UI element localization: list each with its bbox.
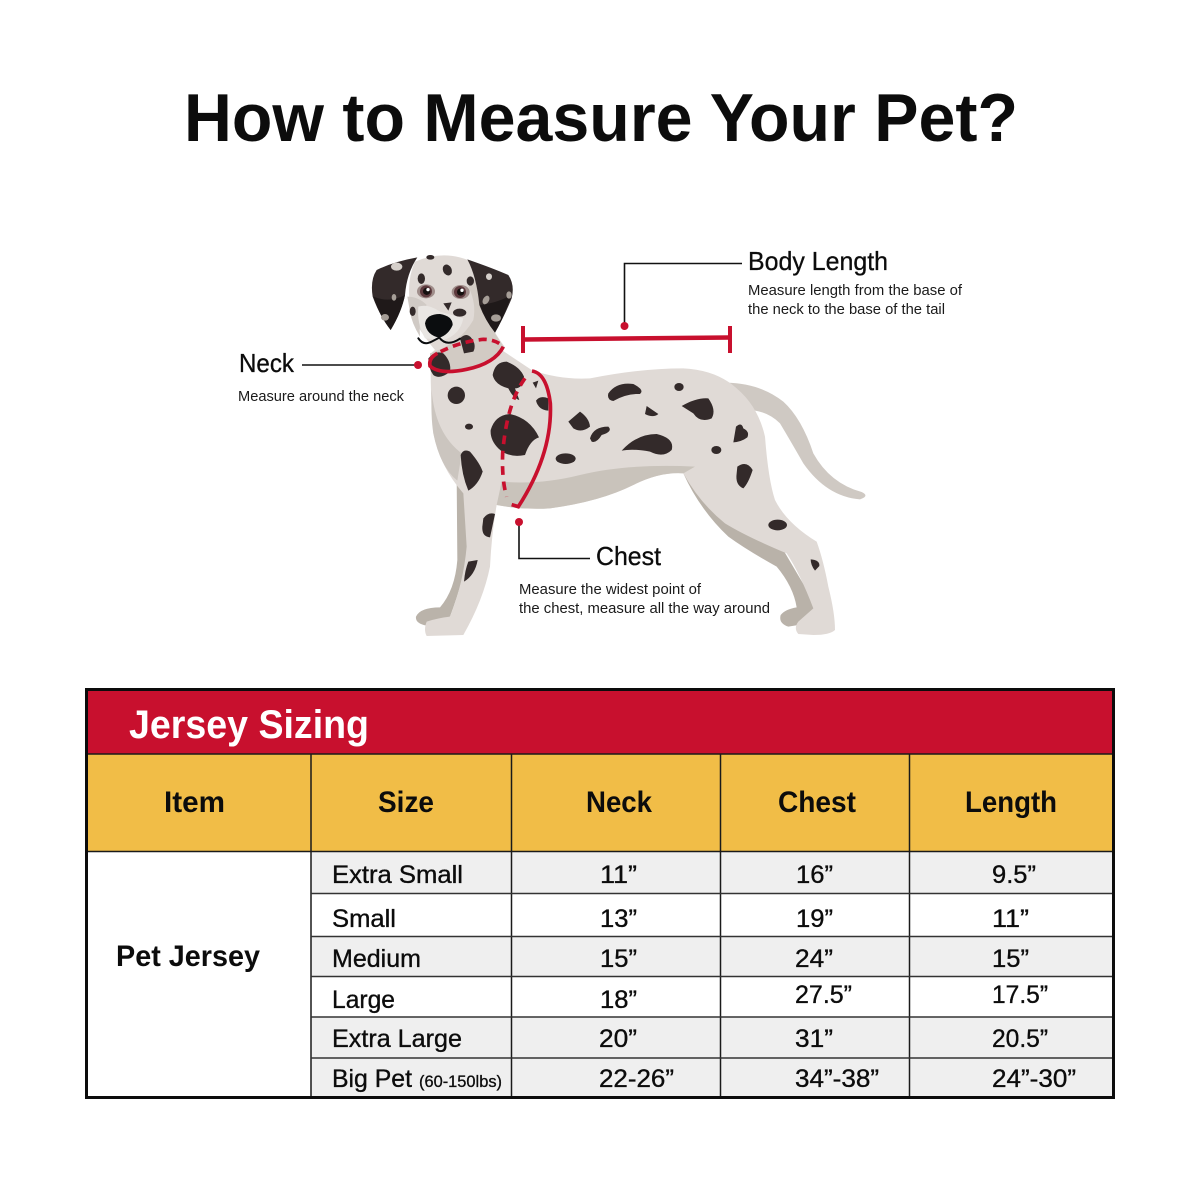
grid lines [311, 754, 910, 1097]
spots [448, 362, 819, 582]
body length label: Measure length from the base of [748, 282, 963, 299]
length values: 15” [992, 945, 1029, 973]
neck values: 20” [599, 1025, 637, 1053]
neck label: Measure around the neck [238, 388, 404, 405]
size names: Small [332, 905, 396, 933]
neck values: 13” [600, 905, 637, 933]
row stripes [311, 852, 1113, 1097]
chest values: 24” [795, 945, 833, 973]
header row: Chest [778, 786, 856, 819]
neck values: 15” [600, 945, 637, 973]
neck and head base [409, 255, 505, 372]
header row: Item [164, 786, 225, 819]
chest values: 31” [795, 1025, 833, 1053]
chest label: Chest [596, 541, 662, 571]
body [425, 347, 835, 636]
size names: Extra Large [332, 1025, 462, 1053]
size names: (60-150lbs) [419, 1072, 502, 1091]
neck values: 18” [600, 986, 637, 1014]
chest measure loop [502, 371, 550, 507]
chest values [795, 861, 879, 1093]
eyes [417, 284, 470, 299]
chest marker [515, 518, 590, 558]
face spots [410, 255, 475, 377]
right ear [467, 259, 513, 333]
table title bar [87, 690, 1113, 754]
table border [86, 690, 1114, 1098]
size names: Big Pet [332, 1065, 412, 1093]
neck label: Neck [239, 348, 295, 378]
length values: 17.5” [992, 981, 1048, 1009]
body length label: Body Length [748, 246, 888, 276]
nose and mouth [418, 314, 460, 343]
neck shade [430, 277, 504, 372]
size names: Medium [332, 945, 421, 973]
title: How to Measure Your Pet? [184, 80, 1018, 156]
size names: Large [332, 986, 395, 1014]
body length label [748, 246, 963, 318]
size names [332, 861, 502, 1093]
chest shade [431, 390, 462, 481]
neck label [238, 348, 404, 405]
body length marker [523, 264, 742, 353]
length values: 11” [992, 905, 1029, 933]
chest label [519, 541, 770, 617]
dog head [372, 255, 513, 377]
length values: 20.5” [992, 1025, 1048, 1053]
header row: Neck [586, 786, 652, 819]
length values [992, 861, 1076, 1093]
neck values: 11” [600, 861, 637, 889]
item name: Pet Jersey [116, 940, 260, 973]
dog body [416, 347, 865, 636]
dog illustration [372, 255, 865, 636]
left cheek shade [407, 297, 427, 337]
header row [87, 754, 1113, 851]
chest values: 19” [796, 905, 833, 933]
far front leg [416, 477, 468, 626]
muzzle highlight [418, 306, 463, 340]
header row: Length [965, 786, 1057, 819]
length values: 24”-30” [992, 1065, 1076, 1093]
size names: Extra Small [332, 861, 463, 889]
chest values: 16” [796, 861, 833, 889]
chest label: Measure the widest point of [519, 581, 702, 598]
belly shade [497, 466, 695, 509]
chest values: 34”-38” [795, 1065, 879, 1093]
header row: Size [378, 786, 434, 819]
far hind leg [683, 467, 817, 627]
body length label: the neck to the base of the tail [748, 301, 945, 318]
neck values: 22-26” [599, 1065, 674, 1093]
neck measure loop [430, 339, 503, 372]
left ear [372, 257, 417, 330]
ear flecks [381, 263, 512, 322]
neck marker [302, 361, 422, 369]
table title bar: Jersey Sizing [129, 703, 369, 747]
neck values [599, 861, 674, 1093]
chest values: 27.5” [795, 981, 852, 1009]
chest label: the chest, measure all the way around [519, 600, 770, 617]
length values: 9.5” [992, 861, 1036, 889]
sizing table [86, 690, 1114, 1098]
tail [727, 383, 865, 499]
